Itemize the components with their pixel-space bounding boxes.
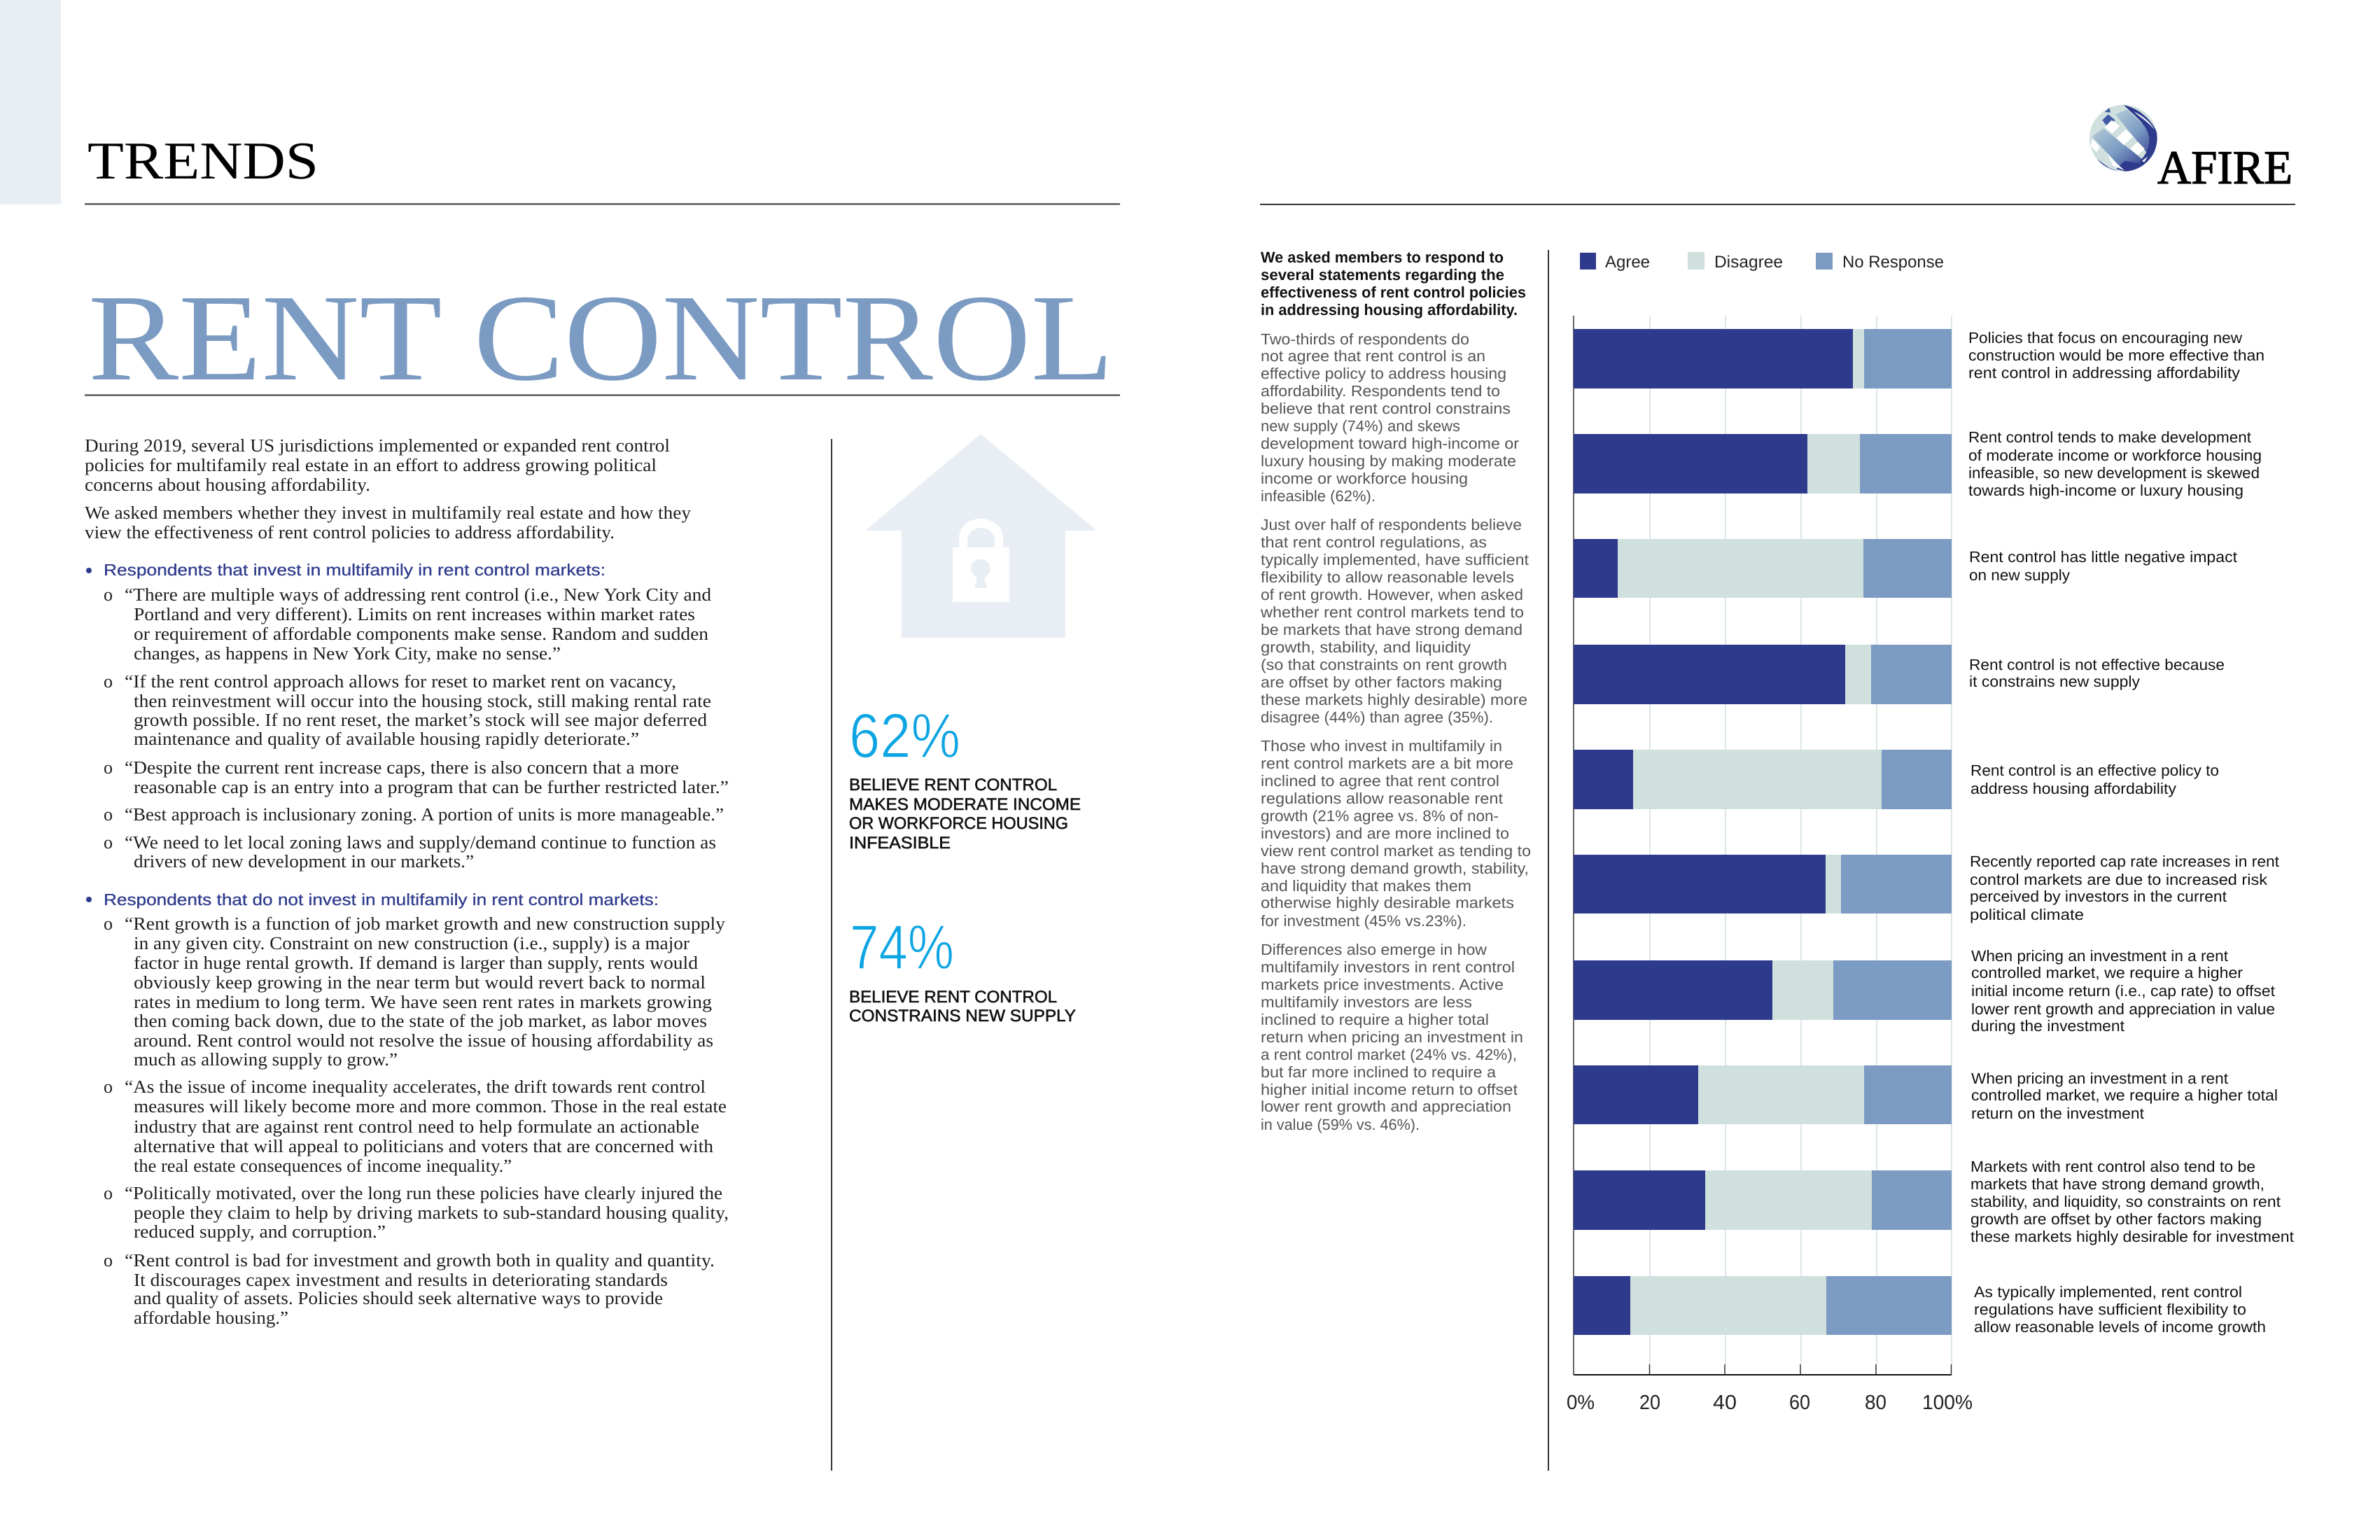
paragraph three: rent control markets are a bit more (1261, 755, 1513, 772)
text block: introduction: During 2019, several US jurisdictions implemented or expanded rent control (85, 435, 670, 456)
text block: non-investor quotes: rates in medium to long term. We have seen rent rates in markets growing (134, 992, 712, 1012)
bar 7 (1574, 960, 1952, 1020)
paragraph four: inclined to require a higher total (1261, 1011, 1489, 1028)
icon: globe (2090, 105, 2157, 172)
paragraph two: disagree (44%) than agree (35%). (1261, 708, 1493, 726)
text block: non-investor quotes: then coming back down, due to the state of the job market, as labor moves (134, 1011, 707, 1031)
stat: 62 percent: BELIEVE RENT CONTROL (849, 776, 1057, 794)
heading: respondents that invest: Respondents that invest in multifamily in rent control markets: (104, 561, 606, 579)
statement 9 (1970, 1158, 2294, 1245)
statement 2: of moderate income or workforce housing (1968, 447, 2262, 464)
text block: investor quotes: “Despite the current rent increase caps, there is also concern that a more (125, 757, 679, 778)
stat: 62 percent: MAKES MODERATE INCOME (849, 795, 1081, 814)
text block: investor quotes: then reinvestment will occur into the housing stock, still making rental rate (134, 691, 711, 711)
statement 6: political climate (1970, 906, 2084, 923)
text block: investor quotes (86, 561, 729, 872)
paragraph two: that rent control regulations, as (1261, 533, 1487, 551)
text block: introduction: We asked members whether they invest in multifamily real estate and how they (85, 503, 691, 523)
paragraph one: luxury housing by making moderate (1261, 452, 1516, 470)
legend: No Response (1842, 253, 1944, 272)
paragraph one: Two-thirds of respondents do (1261, 330, 1469, 348)
paragraph two: be markets that have strong demand (1261, 621, 1522, 638)
statement 5 (1970, 762, 2219, 797)
paragraph four: a rent control market (24% vs. 42%), (1261, 1046, 1517, 1063)
paragraph one: effective policy to address housing (1261, 365, 1506, 382)
text block: introduction: concerns about housing affordability. (85, 475, 370, 495)
x-axis labels: 100% (1922, 1392, 1973, 1414)
paragraph two: growth, stability, and liquidity (1261, 638, 1471, 656)
text block: non-investor quotes: industry that are against rent control need to help formulate an actionable (134, 1116, 699, 1137)
paragraph four: return when pricing an investment in (1261, 1028, 1523, 1046)
statement 9: growth are offset by other factors making (1970, 1210, 2262, 1228)
stat: 62 percent: INFEASIBLE (849, 834, 951, 853)
bar 8 (1574, 1065, 1952, 1124)
paragraph one: infeasible (62%). (1261, 487, 1376, 505)
text block: introduction: view the effectiveness of rent control policies to address affordability. (85, 522, 615, 542)
text block: introduction: policies for multifamily real estate in an effort to address growing political (85, 455, 657, 475)
bar labels (1968, 329, 2294, 1336)
wordmark: AFIRE (2157, 141, 2292, 194)
subheading: survey question: We asked members to respond to (1261, 248, 1504, 266)
paragraph two (1260, 516, 1529, 726)
paragraph three: and liquidity that makes them (1261, 877, 1471, 895)
statement 9: Markets with rent control also tend to be (1970, 1158, 2255, 1175)
paragraph four: markets price investments. Active (1261, 976, 1504, 993)
bar 3 (1574, 539, 1952, 598)
logo: AFIRE (2090, 105, 2290, 184)
bar 10 (1574, 1276, 1952, 1335)
statement 3: Rent control has little negative impact (1969, 548, 2237, 566)
paragraph four (1261, 941, 1523, 1133)
text block: investor quotes: maintenance and quality of available housing rapidly deteriorate.” (134, 729, 639, 749)
statement 5: Rent control is an effective policy to (1970, 762, 2219, 779)
text block: non-investor quotes: the real estate consequences of income inequality.” (134, 1156, 512, 1176)
icon: house with padlock (865, 434, 1097, 638)
text block: investor quotes: “There are multiple ways of addressing rent control (i.e., New York City and (125, 584, 711, 605)
legend: Disagree (1714, 253, 1783, 272)
paragraph one (1261, 330, 1519, 505)
statement 10: As typically implemented, rent control (1974, 1283, 2242, 1301)
statement 8: controlled market, we require a higher total (1971, 1086, 2278, 1104)
text block: non-investor quotes: in any given city. Constraint on new construction (i.e., supply) is a major (134, 933, 690, 953)
paragraph one: development toward high-income or (1261, 435, 1519, 452)
heading: respondents that do not invest: Respondents that do not invest in multifamily in rent control markets: (104, 890, 659, 909)
stat: 74 percent: BELIEVE RENT CONTROL (849, 988, 1057, 1007)
paragraph four: higher initial income return to offset (1261, 1081, 1518, 1098)
statement 9: markets that have strong demand growth, (1970, 1175, 2264, 1193)
x-axis labels: 40 (1713, 1392, 1737, 1414)
text block: non-investor quotes: around. Rent control would not resolve the issue of housing affordability as (134, 1030, 713, 1051)
statement 4: Rent control is not effective because (1969, 656, 2225, 673)
text block: non-investor quotes: people they claim to help by driving markets to sub-standard housing quality, (134, 1203, 729, 1223)
text block: investor quotes: reasonable cap is an entry into a program that can be further restricted later.” (134, 777, 729, 797)
text block: investor quotes: o (104, 584, 113, 605)
text block: non-investor quotes: o (104, 1250, 113, 1270)
text block: non-investor quotes: “As the issue of income inequality accelerates, the drift towards rent control (125, 1077, 706, 1097)
statement 4 (1969, 656, 2225, 690)
text block: investor quotes: o (104, 804, 113, 825)
decorative corner tab (0, 0, 61, 204)
statement 8 (1971, 1070, 2278, 1122)
statement 1: Policies that focus on encouraging new (1968, 329, 2242, 346)
stat: 74 percent (849, 913, 1076, 1026)
paragraph four: but far more inclined to require a (1261, 1063, 1497, 1081)
text block: non-investor quotes: obviously keep growing in the near term but would revert back to normal (134, 972, 706, 993)
statement 8: return on the investment (1971, 1105, 2144, 1122)
paragraph one: believe that rent control constrains (1261, 400, 1511, 417)
statement 10 (1974, 1283, 2266, 1336)
statement 7: When pricing an investment in a rent (1971, 947, 2228, 965)
text block: introduction (85, 435, 691, 542)
legend: Agree (1605, 253, 1650, 272)
statement 7: lower rent growth and appreciation in value (1971, 1000, 2275, 1018)
text block: non-investor quotes: alternative that will appeal to politicians and voters that are concerned with (134, 1136, 713, 1156)
paragraph two: typically implemented, have sufficient (1261, 551, 1529, 568)
statement 7 (1971, 947, 2275, 1035)
text block: non-investor quotes: factor in huge rental growth. If demand is larger than supply, rents would (134, 953, 698, 973)
stacked bar chart: agreement by statement (1567, 316, 1973, 1414)
paragraph three: have strong demand growth, stability, (1261, 860, 1529, 877)
paragraph two: (so that constraints on rent growth (1261, 656, 1507, 673)
paragraph four: lower rent growth and appreciation (1261, 1098, 1511, 1115)
text block: non-investor quotes: measures will likely become more and more common. Those in the real estate (134, 1096, 727, 1116)
bar 4 (1574, 645, 1952, 704)
text block: investor quotes: drivers of new development in our markets.” (134, 851, 474, 872)
text block: non-investor quotes: o (104, 913, 113, 934)
paragraph two: of rent growth. However, when asked (1261, 586, 1523, 603)
paragraph three: inclined to agree that rent control (1261, 772, 1499, 790)
text block: investor quotes: o (104, 671, 113, 692)
statement 9: these markets highly desirable for investment (1970, 1228, 2294, 1245)
statement 4: it constrains new supply (1969, 673, 2140, 690)
text block: non-investor quotes: much as allowing supply to grow.” (134, 1049, 398, 1070)
stat: 74 percent: CONSTRAINS NEW SUPPLY (849, 1007, 1076, 1026)
statement 5: address housing affordability (1970, 780, 2176, 797)
x-axis labels (1567, 1392, 1973, 1414)
stat: 74 percent: 74% (850, 913, 954, 983)
subheading: survey question: several statements regarding the (1261, 266, 1504, 284)
statement 3 (1969, 548, 2237, 584)
paragraph three: otherwise highly desirable markets (1261, 894, 1514, 911)
statement 8: When pricing an investment in a rent (1971, 1070, 2228, 1087)
paragraph two: these markets highly desirable) more (1261, 691, 1527, 708)
paragraph two: whether rent control markets tend to (1260, 603, 1524, 621)
text block: investor quotes: or requirement of affordable components make sense. Random and sudden (134, 624, 708, 644)
bar 1 (1574, 329, 1952, 388)
paragraph two: Just over half of respondents believe (1261, 516, 1522, 533)
paragraph four: in value (59% vs. 46%). (1261, 1116, 1420, 1133)
text block: investor quotes: “Best approach is inclusionary zoning. A portion of units is more manageable.” (125, 804, 724, 825)
statement 1: rent control in addressing affordability (1968, 364, 2240, 382)
statement 10: allow reasonable levels of income growth (1974, 1318, 2266, 1336)
statement 10: regulations have sufficient flexibility to (1974, 1301, 2246, 1318)
statement 6: perceived by investors in the current (1970, 888, 2227, 905)
text block: non-investor quotes: affordable housing.” (134, 1308, 288, 1328)
statement 2: Rent control tends to make development (1968, 428, 2251, 446)
text block: non-investor quotes: o (104, 1183, 113, 1203)
statement 6: control markets are due to increased risk (1970, 871, 2268, 888)
paragraph three (1261, 737, 1531, 930)
x-axis labels: 80 (1865, 1392, 1886, 1414)
bar 2 (1574, 434, 1952, 493)
text block: non-investor quotes: “Rent growth is a function of job market growth and new construction supply (125, 913, 725, 934)
text block: investor quotes: growth possible. If no rent reset, the market’s stock will see major deferred (134, 710, 707, 730)
bar 5 (1574, 750, 1952, 809)
subheading: survey question: in addressing housing affordability. (1261, 301, 1518, 318)
paragraph one: income or workforce housing (1261, 470, 1468, 487)
x-axis labels: 60 (1789, 1392, 1810, 1414)
statement 9: stability, and liquidity, so constraints on rent (1970, 1193, 2281, 1210)
text block: non-investor quotes: “Politically motivated, over the long run these policies have clearly injured the (125, 1183, 722, 1203)
text block: investor quotes: “We need to let local zoning laws and supply/demand continue to function as (125, 832, 716, 853)
text block: investor quotes: Portland and very different). Limits on rent increases within market rates (134, 604, 695, 624)
text block: non-investor quotes (86, 890, 729, 1328)
statement 1: construction would be more effective than (1968, 346, 2264, 364)
text block: non-investor quotes: o (104, 1077, 113, 1097)
paragraph four: multifamily investors are less (1261, 993, 1472, 1011)
x-axis labels: 0% (1567, 1392, 1595, 1414)
bar 6 (1574, 855, 1952, 913)
paragraph three: growth (21% agree vs. 8% of non- (1261, 807, 1499, 825)
paragraph three: view rent control market as tending to (1261, 842, 1531, 860)
statement 7: initial income return (i.e., cap rate) to offset (1971, 982, 2275, 1000)
text block: non-investor quotes: “Rent control is bad for investment and growth both in quality and quantity. (125, 1250, 715, 1270)
paragraph four: multifamily investors in rent control (1261, 958, 1515, 976)
statement 7: during the investment (1971, 1017, 2124, 1035)
statement 7: controlled market, we require a higher (1971, 964, 2243, 981)
statement 3: on new supply (1969, 566, 2070, 584)
subheading: survey question (1261, 248, 1526, 318)
paragraph one: new supply (74%) and skews (1261, 417, 1460, 435)
text block: non-investor quotes: It discourages capex investment and results in deteriorating standards (134, 1270, 668, 1290)
title: RENT CONTROL (88, 270, 1114, 407)
statement 6: Recently reported cap rate increases in rent (1970, 853, 2279, 870)
text block: investor quotes: changes, as happens in New York City, make no sense.” (134, 643, 561, 664)
paragraph two: flexibility to allow reasonable levels (1261, 568, 1514, 586)
statement 1 (1968, 329, 2264, 382)
legend (1580, 252, 1944, 272)
paragraph three: investors) and are more inclined to (1261, 825, 1509, 842)
paragraph two: are offset by other factors making (1261, 673, 1502, 691)
stat: 62 percent (849, 701, 1081, 853)
statement 2: infeasible, so new development is skewed (1968, 464, 2260, 482)
x-axis labels: 20 (1639, 1392, 1660, 1414)
statement 2: towards high-income or luxury housing (1968, 482, 2244, 499)
text block: non-investor quotes: reduced supply, and corruption.” (134, 1222, 386, 1242)
section label: trends: TRENDS (88, 132, 318, 190)
statement 6 (1970, 853, 2279, 923)
paragraph one: not agree that rent control is an (1261, 347, 1485, 365)
text block: survey commentary (1260, 248, 1531, 1133)
stat: 62 percent: 62% (849, 701, 960, 771)
subheading: survey question: effectiveness of rent control policies (1261, 284, 1526, 301)
text block: investor quotes: o (104, 832, 113, 853)
paragraph four: Differences also emerge in how (1261, 941, 1487, 958)
paragraph three: Those who invest in multifamily in (1261, 737, 1502, 755)
text block: investor quotes: “If the rent control approach allows for reset to market rent on vacancy, (125, 671, 676, 692)
paragraph three: regulations allow reasonable rent (1261, 790, 1503, 807)
text block: investor quotes: o (104, 757, 113, 778)
bar 9 (1574, 1170, 1952, 1230)
statement 2 (1968, 428, 2262, 499)
paragraph one: affordability. Respondents tend to (1261, 382, 1500, 400)
stat: 62 percent: OR WORKFORCE HOUSING (849, 814, 1068, 833)
text block: non-investor quotes: and quality of assets. Policies should seek alternative ways to provide (134, 1288, 663, 1308)
paragraph three: for investment (45% vs.23%). (1261, 912, 1466, 930)
